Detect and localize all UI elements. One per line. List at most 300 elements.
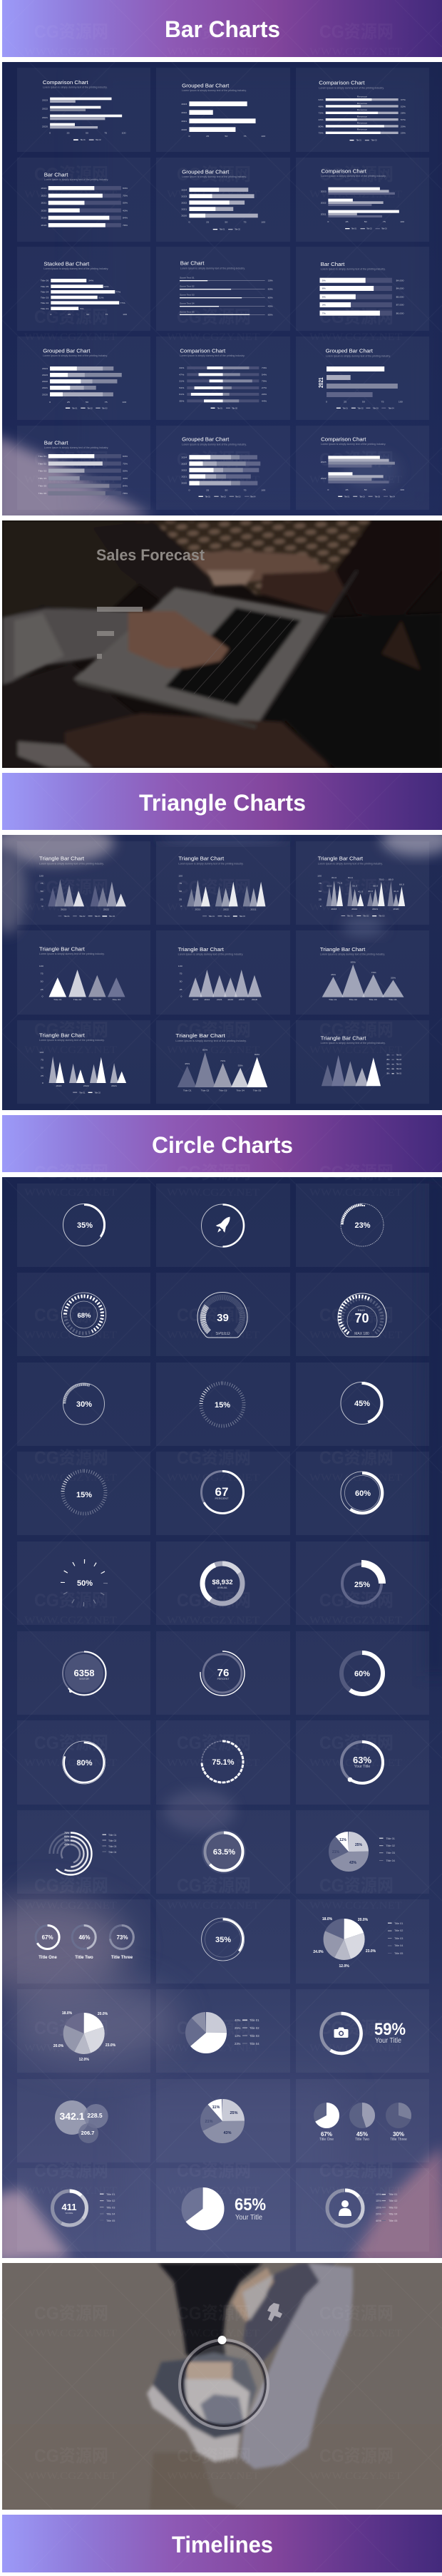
chart: Grouped Bar Chart 1: 2022	[181, 111, 187, 114]
legend: Title 05	[394, 1952, 403, 1955]
photo: hands typing on laptop with Sales Forecast caption	[2, 520, 442, 768]
chart: 45% ring	[296, 1363, 429, 1446]
chart: Triangle Bar Chart 4: Title 04	[112, 998, 120, 1001]
chart: Bar Chart 1: 2018	[41, 224, 47, 227]
chart: Triangle Bar Chart 2: Title 01	[208, 915, 215, 918]
chart: Triangle Bar Chart 3: Title 03	[379, 915, 385, 918]
chart: Comparison Chart 4: 54%	[262, 374, 267, 376]
chart: pie 5: 21%	[205, 2120, 213, 2124]
chart: Comparison Chart 4: 61%	[179, 393, 184, 396]
chart: Bar Chart 2: 85%	[268, 314, 273, 316]
chart: Triangle Bar Chart 6: 35%	[391, 977, 396, 979]
legend: Title 03	[389, 2206, 397, 2209]
chart: Triangle Bar Chart 9: Title 04	[396, 1067, 402, 1070]
chart: Triangle Bar Chart 9: 25%	[386, 1058, 390, 1061]
chart: 15% tick ring	[156, 1363, 290, 1446]
chart: Comparison Chart 4: Lorem Ipsum is simply dummy text of the printing industry.	[180, 354, 245, 357]
chart: Comparison Chart 2: 28%	[401, 112, 406, 115]
legend: 40%	[376, 2220, 381, 2222]
chart: pie 3 with labels: 20.0%	[98, 2012, 108, 2016]
chart: Comparison Chart 4: 47%	[179, 374, 184, 376]
legend: Title 01	[106, 2193, 115, 2196]
chart: Comparison Chart 2: 72%	[319, 112, 324, 115]
chart: Comparison Chart 3: Comparison Chart	[321, 168, 367, 174]
chart: pie 1: 21%	[332, 1850, 340, 1854]
chart: Comparison Chart 2: 48%	[319, 106, 324, 108]
chart: Grouped Bar Chart 3: 50	[86, 401, 88, 404]
chart: Bar Chart 1: 2021	[41, 202, 47, 205]
legend: Title 02	[394, 1929, 403, 1932]
chart: Triangle Bar Chart 4: Lorem Ipsum is simply dummy text of the printing industry.	[39, 953, 105, 955]
chart: Comparison Chart 2: Title 01	[356, 139, 361, 142]
chart: Triangle Bar Chart 1	[17, 841, 150, 925]
chart: Triangle Bar Chart 1: 0	[41, 905, 43, 908]
chart: Comparison Chart 2: Revenue	[357, 122, 367, 124]
chart: Triangle Bar Chart 3: 71.0	[337, 882, 342, 885]
chart: 67 ring: 67	[215, 1485, 228, 1499]
chart: Comparison Chart 5: Title 01	[344, 496, 350, 498]
chart: Triangle Bar Chart 2: 75	[179, 882, 182, 885]
chart: Triangle Bar Chart 6: Title 02	[349, 998, 357, 1001]
chart: Grouped Bar Chart 3: 2023	[42, 374, 48, 376]
chart: Comparison Chart 1: Comparison Chart	[43, 80, 88, 86]
chart: three small pies: 67%	[321, 2131, 332, 2138]
chart: Grouped Bar Chart 4: Title 01	[342, 407, 348, 409]
chart: Bar Chart 4: Title 05	[38, 485, 46, 488]
chart: Triangle Bar Chart 1: 2023	[61, 908, 66, 911]
chart: concentric arcs: 55%	[64, 1839, 69, 1842]
chart: 6358 ring	[17, 1631, 150, 1715]
chart: Bar Chart 3: 8%	[322, 287, 326, 290]
chart: Stacked Bar Chart: 75	[105, 313, 108, 316]
legend: Title 05	[106, 2220, 115, 2222]
chart: Comparison Chart 3: 2023	[321, 190, 327, 193]
chart: 15% tick ring: 15%	[215, 1401, 230, 1410]
chart: Comparison Chart 2: Title 02	[371, 139, 377, 142]
chart: 35% ring: 35%	[77, 1221, 93, 1230]
chart: Comparison Chart 5: 2022	[321, 477, 327, 480]
chart: Grouped Bar Chart 1: Lorem Ipsum is simply dummy text of the printing industry.	[182, 89, 247, 92]
chart: Triangle Bar Chart 2: 100	[178, 875, 183, 878]
chart: Grouped Bar Chart 4: Title 03	[373, 407, 379, 409]
chart: Comparison Chart 1: 25	[67, 132, 70, 134]
panel: bar charts	[0, 62, 442, 528]
chart: 65% pie: 65%	[235, 2195, 266, 2215]
chart: pie 3 with labels: 12.0%	[79, 2058, 89, 2062]
chart: Triangle Bar Chart 7: 2021	[111, 1084, 117, 1087]
chart: three small pies: 30%	[393, 2131, 404, 2138]
chart: Grouped Bar Chart 3: 2024	[42, 367, 48, 370]
chart: Comparison Chart 4: 44%	[262, 400, 267, 402]
chart: Comparison Chart 2: 75%	[319, 132, 324, 135]
legend: Title 01	[394, 1922, 403, 1925]
chart: 50% spoke ring: 50%	[77, 1579, 93, 1588]
chart: 80% ring	[17, 1720, 150, 1805]
chart: Stacked Bar Chart: 34%	[88, 279, 93, 282]
chart: Grouped Bar Chart 1: 75	[244, 135, 247, 138]
chart: Comparison Chart 1	[17, 68, 150, 152]
chart: Stacked Bar Chart: 5%	[80, 307, 84, 310]
heading: Timelines: Timelines	[172, 2532, 273, 2557]
chart: Triangle Bar Chart 9: Title 05	[396, 1072, 402, 1075]
legend: 25%	[235, 2026, 241, 2030]
chart: user ring with legend	[296, 2168, 429, 2252]
chart: Triangle Bar Chart 6: 85%	[351, 961, 356, 964]
chart: Triangle Bar Chart 7: 25	[41, 1074, 43, 1077]
chart: Comparison Chart 1: Title 02	[96, 138, 101, 141]
legend: Title 01	[386, 1837, 395, 1840]
icon: progress ring	[180, 2336, 268, 2428]
chart: Grouped Bar Chart 4: 50	[362, 401, 365, 403]
chart: Stacked Bar Chart: Title 02	[41, 302, 49, 304]
legend: Title 03	[106, 2206, 115, 2209]
chart: Triangle Bar Chart 6: Triangle Bar Chart	[320, 947, 366, 953]
legend: Title 02	[386, 1844, 395, 1847]
chart: Grouped Bar Chart 5: 2024	[181, 456, 187, 458]
legend: 20%	[376, 2213, 381, 2216]
chart: Grouped Bar Chart 2: 2023	[181, 195, 187, 197]
chart: Stacked Bar Chart: 25	[68, 313, 71, 316]
chart: Grouped Bar Chart 5: Title 01	[205, 496, 210, 498]
chart: Bar Chart 4: Title 04	[38, 477, 46, 480]
chart: 63% ring with dot	[296, 1720, 429, 1805]
chart: pie 1	[296, 1810, 429, 1894]
chart: pie 4 with legend	[156, 1989, 290, 2073]
chart: three small pies: Title Three	[390, 2138, 407, 2142]
chart: Grouped Bar Chart 1	[156, 68, 290, 152]
chart: Bar Chart 4: 63%	[123, 455, 128, 458]
chart: pie 5: 43%	[223, 2131, 232, 2135]
chart: Comparison Chart 1: 100	[122, 132, 126, 134]
heading: Sales Forecast: Sales Forecast	[96, 546, 205, 564]
chart: three small rings: 73%	[116, 1934, 128, 1941]
chart: Triangle Bar Chart 1: Title 01	[63, 915, 70, 918]
chart: Comparison Chart 3: Lorem Ipsum is simply dummy text of the printing industry.	[321, 175, 386, 178]
legend	[376, 2193, 397, 2222]
chart: overlapping bubbles: 228.5	[87, 2112, 103, 2119]
chart: pie 2 with labels: 12.0%	[339, 1964, 349, 1969]
chart: pie 2 with labels: 24.0%	[313, 1950, 324, 1954]
chart: Grouped Bar Chart 3: 75	[105, 401, 108, 404]
chart: Bar Chart 1: 84%	[123, 217, 128, 220]
chart: Bar Chart 3: 5%	[322, 296, 326, 298]
chart: Comparison Chart 1: 2020	[42, 125, 48, 128]
chart: Grouped Bar Chart 3: 2020	[42, 394, 48, 396]
chart: Comparison Chart 1: 2022	[42, 108, 48, 111]
chart: Triangle Bar Chart 1: 100	[39, 875, 43, 878]
chart: Triangle Bar Chart 2: 2022	[223, 908, 229, 911]
chart: Comparison Chart 5: Title 03	[374, 496, 380, 498]
chart: Grouped Bar Chart 4: 2021	[317, 377, 324, 388]
chart: Grouped Bar Chart 5: 2021	[181, 476, 187, 478]
chart: Grouped Bar Chart 5	[156, 426, 290, 510]
chart: pie 1: 11%	[339, 1838, 346, 1842]
chart: speedometer 70: KM/H	[358, 1308, 365, 1312]
chart: Stacked Bar Chart: Title 05	[41, 285, 49, 288]
chart: Grouped Bar Chart 3: Title 03	[102, 407, 108, 409]
chart: Triangle Bar Chart 8	[156, 1020, 290, 1104]
legend: Title 03	[386, 1852, 395, 1854]
legend: Title 05	[389, 2220, 397, 2222]
chart: Comparison Chart 4: 73%	[262, 366, 267, 369]
chart: Bar Chart 2: 80%	[268, 297, 273, 299]
chart: 60% thick ring: 60%	[354, 1670, 370, 1678]
chart: Comparison Chart 2: 43%	[319, 118, 324, 121]
chart: Bar Chart 3: 3%	[322, 304, 326, 307]
chart: Triangle Bar Chart 8: 85%	[202, 1049, 207, 1052]
chart: Bar Chart 1: 50%	[123, 202, 128, 205]
chart: Grouped Bar Chart 4: Grouped Bar Chart	[326, 348, 374, 354]
chart: Grouped Bar Chart 2: 2021	[181, 208, 187, 210]
legend: Title 03	[108, 1845, 116, 1848]
watermark overlay on shoe photo	[2, 2263, 442, 2510]
chart: Grouped Bar Chart 5: 100	[261, 489, 265, 491]
chart: Grouped Bar Chart 2: 100	[261, 221, 265, 224]
chart: Bar Chart 3: $4,000	[396, 279, 404, 282]
chart: Triangle Bar Chart 5	[156, 930, 290, 1015]
chart: Comparison Chart 1: 2023	[42, 99, 48, 102]
chart: 15% tick ring 2	[17, 1452, 150, 1535]
chart: Comparison Chart 3: 75	[383, 220, 386, 223]
chart: Stacked Bar Chart: 100	[123, 313, 127, 316]
chart: Comparison Chart 4: 20%	[262, 393, 267, 396]
icon: rocket	[213, 1213, 235, 1236]
chart: Triangle Bar Chart 5: 0	[180, 995, 183, 998]
chart: Triangle Bar Chart 3: Title 02	[363, 915, 369, 918]
chart: Comparison Chart 3: Title 01	[351, 227, 357, 230]
chart: Triangle Bar Chart 3: 25	[319, 898, 322, 900]
chart: Bar Chart 4: Bar Chart	[44, 440, 68, 446]
chart: three small rings: Title Three	[111, 1956, 133, 1960]
chart: 23% dotted ring	[296, 1184, 429, 1267]
chart: Triangle Bar Chart 5: Lorem Ipsum is simply dummy text of the printing industry.	[178, 953, 243, 956]
chart: Comparison Chart 4: Comparison Chart	[180, 348, 226, 354]
chart: Triangle Bar Chart 8: Title 05	[253, 1089, 261, 1092]
banner: Timelines	[2, 2515, 442, 2572]
chart: Triangle Bar Chart 3: 41.0	[394, 890, 399, 893]
chart: Comparison Chart 5: 50	[364, 488, 367, 491]
chart: Stacked Bar Chart: Stacked Bar Chart	[43, 261, 90, 267]
chart: Triangle Bar Chart 5: 2021	[217, 998, 222, 1001]
chart: Grouped Bar Chart 3: 0	[49, 401, 51, 404]
chart: Triangle Bar Chart 1: Lorem Ipsum is simply dummy text of the printing industry.	[39, 863, 104, 865]
chart: Comparison Chart 3	[296, 158, 429, 242]
chart: Triangle Bar Chart 3: 56.0	[352, 885, 357, 887]
chart: Triangle Bar Chart 9: Triangle Bar Chart	[321, 1035, 366, 1041]
chart: Triangle Bar Chart 3: 2022	[351, 908, 357, 910]
chart: Triangle Bar Chart 4: 0	[41, 995, 43, 998]
chart: Bar Chart 1: 43%	[123, 210, 128, 212]
chart: 68% segmented ring: 68%	[77, 1312, 91, 1320]
chart: Triangle Bar Chart 3: 80.0	[389, 878, 394, 881]
chart: Triangle Bar Chart 3: 84.0	[332, 876, 336, 879]
chart: pie 1: 43%	[349, 1861, 357, 1865]
chart: Bar Chart 3: 5%	[322, 279, 326, 282]
chart: Triangle Bar Chart 5: 2018	[252, 998, 257, 1001]
chart: Grouped Bar Chart 4: Title 02	[357, 407, 364, 409]
chart: Grouped Bar Chart 2: 0	[188, 221, 190, 224]
chart: Triangle Bar Chart 9: 10%	[386, 1054, 390, 1057]
chart: Bar Chart 1: 63%	[123, 187, 128, 190]
chart: Triangle Bar Chart 7: 2022	[83, 1084, 89, 1087]
chart: Triangle Bar Chart 7: Title 02	[94, 1092, 101, 1094]
chart: Bar Chart 4: Title 06	[38, 492, 46, 495]
chart: Grouped Bar Chart 2: 50	[225, 221, 228, 224]
chart: three small pies	[296, 2079, 429, 2162]
chart: Triangle Bar Chart 3: 2021	[372, 908, 378, 910]
chart: Comparison Chart 5: 2023	[321, 461, 327, 463]
chart: speedometer 70: 70	[354, 1311, 369, 1325]
chart: Triangle Bar Chart 6: Title 03	[369, 998, 377, 1001]
chart: Comparison Chart 3: 0	[327, 220, 329, 223]
chart: Comparison Chart 5: Title 04	[389, 496, 395, 498]
chart: Comparison Chart 1: 75	[104, 132, 107, 134]
chart: Stacked Bar Chart	[17, 247, 150, 331]
chart: three small pies: 45%	[356, 2131, 368, 2138]
chart: 35% ring	[17, 1184, 150, 1267]
chart: Grouped Bar Chart 5: 2020	[181, 482, 187, 485]
chart: 65% pie: Your Title	[235, 2214, 262, 2222]
chart: Stacked Bar Chart: Title 03	[41, 297, 49, 299]
legend	[388, 1922, 403, 1955]
chart: Comparison Chart 2: Revenue	[357, 102, 367, 105]
chart: Bar Chart 4: 75%	[123, 463, 128, 465]
chart: Bar Chart 2: Some Text 04	[180, 302, 195, 305]
chart: Triangle Bar Chart 9: Title 03	[396, 1063, 402, 1066]
chart: Bar Chart 1: 2020	[41, 210, 47, 212]
chart: 63% ring with dot: 63%	[353, 1755, 371, 1765]
chart: 35% fine ring	[156, 1899, 290, 1984]
legend	[100, 2193, 115, 2222]
chart: Triangle Bar Chart 9	[296, 1020, 429, 1104]
legend: Title 03	[250, 2034, 259, 2038]
chart: Triangle Bar Chart 5: 2023	[192, 998, 198, 1001]
chart: Triangle Bar Chart 7	[17, 1020, 150, 1104]
chart: Bar Chart 4: Title 03	[38, 470, 46, 472]
chart: 65% pie	[156, 2168, 290, 2252]
legend: 40%	[235, 2018, 241, 2022]
chart: Triangle Bar Chart 1: 50	[41, 890, 43, 893]
chart: Triangle Bar Chart 1: Title 03	[94, 915, 101, 918]
chart: concentric arcs: 75%	[64, 1832, 69, 1834]
chart: Triangle Bar Chart 6: Lorem Ipsum is simply dummy text of the printing industry.	[320, 953, 385, 956]
chart: Triangle Bar Chart 2: 2023	[195, 908, 200, 911]
chart: Triangle Bar Chart 1: 75	[41, 882, 43, 885]
chart: Triangle Bar Chart 1: 25	[41, 898, 43, 900]
chart: Stacked Bar Chart: Title 01	[41, 307, 49, 310]
chart: Triangle Bar Chart 9: Title 02	[396, 1058, 402, 1061]
chart: Bar Chart 2	[156, 247, 290, 331]
chart: Bar Chart 2: Lorem Ipsum is simply dummy text of the printing industry.	[180, 267, 245, 270]
chart: Comparison Chart 5: 25	[346, 488, 349, 491]
chart: Bar Chart 4: 84%	[123, 485, 128, 488]
chart: Comparison Chart 5	[296, 426, 429, 510]
chart: Grouped Bar Chart 3: 2022	[42, 380, 48, 383]
chart: Grouped Bar Chart 3: Grouped Bar Chart	[43, 348, 91, 354]
chart: Grouped Bar Chart 3: Lorem Ipsum is simply dummy text of the printing industry.	[43, 354, 108, 357]
chart: Triangle Bar Chart 4: Title 02	[73, 998, 82, 1001]
legend	[379, 1837, 395, 1862]
chart: Comparison Chart 1: Lorem Ipsum is simply dummy text of the printing industry.	[43, 86, 108, 89]
chart: 25% sector ring	[296, 1541, 429, 1625]
chart: concentric arcs: 45%	[64, 1843, 69, 1846]
chart: Stacked Bar Chart: Lorem Ipsum is simply dummy text of the printing industry.	[43, 267, 108, 270]
chart: Comparison Chart 5: 100	[400, 488, 404, 491]
chart: pie 3 with labels: 18.0%	[62, 2011, 73, 2016]
chart: Bar Chart 4: Lorem Ipsum is simply dummy text of the printing industry.	[44, 446, 108, 449]
chart: Triangle Bar Chart 5: 100	[178, 965, 183, 968]
chart: Triangle Bar Chart 8: 70%	[220, 1059, 225, 1062]
chart: speedometer 70	[296, 1273, 429, 1356]
chart: Bar Chart 2: Some Text 01	[180, 277, 195, 279]
chart: Comparison Chart 4: Title 01	[217, 407, 222, 409]
chart: 60% double ring: 60%	[355, 1489, 371, 1498]
chart: Triangle Bar Chart 6	[296, 930, 429, 1015]
legend: Title 02	[108, 1839, 116, 1842]
chart: Bar Chart 4: 50%	[123, 470, 128, 472]
chart: three small rings: Title Two	[75, 1956, 93, 1960]
chart: Triangle Bar Chart 6: Title 04	[389, 998, 397, 1001]
chart: Triangle Bar Chart 3: 2023	[331, 908, 336, 910]
chart: Grouped Bar Chart 3: 100	[122, 401, 126, 404]
chart: Comparison Chart 3: 50	[364, 220, 367, 223]
chart: Stacked Bar Chart: 51%	[98, 297, 103, 299]
chart: Grouped Bar Chart 4: 75	[381, 401, 384, 403]
chart: Grouped Bar Chart 5: Title 03	[235, 496, 241, 498]
chart: 59% camera ring: Your Title	[375, 2037, 401, 2045]
chart: Bar Chart 1: 75%	[123, 195, 128, 197]
chart: Comparison Chart 2: 37%	[401, 98, 406, 101]
chart: Comparison Chart 5: 0	[327, 488, 329, 491]
chart: Triangle Bar Chart 3: 2020	[394, 908, 399, 910]
chart: 411 ring with legend: SCORE	[66, 2212, 73, 2215]
chart: Triangle Bar Chart 8: Lorem Ipsum is simply dummy text of the printing industry.	[175, 1040, 247, 1042]
chart: Grouped Bar Chart 2: Title 01	[219, 228, 225, 231]
chart: $8,932 ring: ANNUAL	[217, 1586, 227, 1589]
chart: Triangle Bar Chart 2: 2021	[250, 908, 257, 911]
chart: Triangle Bar Chart 6: 45%	[331, 973, 336, 976]
chart: Comparison Chart 4: Title 02	[232, 407, 237, 409]
chart: Comparison Chart 5: 75	[383, 488, 386, 491]
chart: Comparison Chart 2: Revenue	[357, 96, 367, 98]
chart: Triangle Bar Chart 3: Triangle Bar Chart	[318, 856, 364, 861]
chart: Grouped Bar Chart 1: 0	[188, 135, 190, 138]
chart: Grouped Bar Chart 5: 75	[244, 489, 247, 491]
legend: 23%	[235, 2042, 241, 2046]
chart: Comparison Chart 4	[156, 337, 290, 420]
chart: Grouped Bar Chart 4: Title 04	[388, 407, 394, 409]
chart: Grouped Bar Chart 1: 2020	[181, 128, 187, 131]
icon: user	[339, 2200, 351, 2216]
chart: pie 3 with labels	[17, 1989, 150, 2073]
chart: Triangle Bar Chart 7: Triangle Bar Chart	[39, 1032, 86, 1038]
chart: Comparison Chart 1: Title 01	[80, 138, 86, 141]
panel: circle charts	[0, 1177, 442, 2267]
chart: three small pies: Title One	[319, 2138, 334, 2142]
chart: 67 ring: PERCENT	[215, 1497, 229, 1500]
chart: 60% double ring	[296, 1452, 429, 1535]
chart: Comparison Chart 3: 100	[400, 220, 404, 223]
chart: overlapping bubbles: 206.7	[81, 2130, 94, 2136]
legend: Title 04	[386, 1859, 395, 1862]
chart: Bar Chart 1: 2019	[41, 217, 47, 220]
chart: Grouped Bar Chart 1: 50	[225, 135, 228, 138]
chart: Grouped Bar Chart 3: Title 01	[72, 407, 78, 409]
chart: Comparison Chart 4: 27%	[262, 386, 267, 389]
chart: Bar Chart 3: $5,000	[396, 296, 404, 298]
chart: 35% fine ring: 35%	[215, 1936, 231, 1944]
chart: Bar Chart 2: Some Text 03	[180, 294, 195, 297]
